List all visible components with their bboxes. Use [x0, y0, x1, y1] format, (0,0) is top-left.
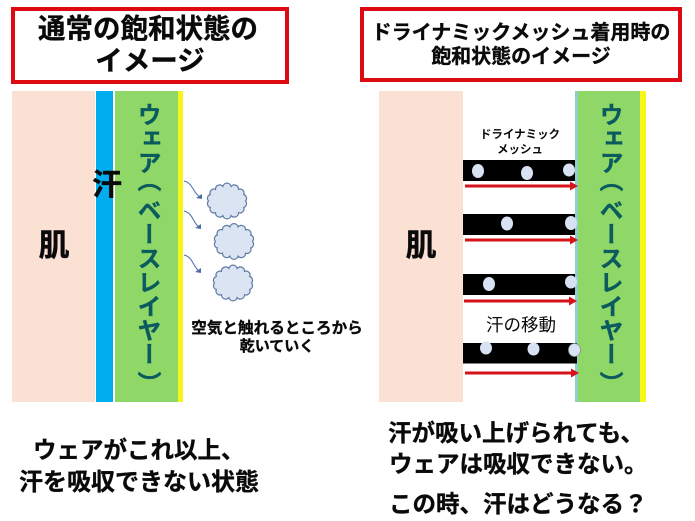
sweat movement label: 汗の移動 [486, 315, 556, 335]
panel: normal saturation [12, 9, 363, 496]
wear layer: ベースレイヤー [133, 198, 160, 366]
evaporation arrow 2 [184, 211, 201, 229]
wear layer [115, 91, 183, 402]
wear layer: ベースレイヤー [595, 198, 622, 366]
wear layer: ） [133, 371, 161, 395]
caption: drying: 乾いていく [240, 337, 314, 355]
arrow 1 [465, 182, 578, 190]
skin layer: 肌 [38, 228, 70, 263]
caption: drying: 空気と触れるところから [191, 318, 363, 337]
title box: dynamic mesh: 飽和状態のイメージ [431, 45, 611, 68]
mesh label: ドライナミック [480, 128, 560, 141]
title box: dynamic mesh: ドライナミックメッシュ着用時の [372, 21, 670, 44]
evaporation arrow 3 [184, 255, 201, 273]
text: sweat is lifted: ウェアは吸収できない。 [389, 451, 648, 477]
arrow 3 [464, 296, 577, 306]
mesh strand 1 [463, 160, 575, 181]
title box: normal saturation [13, 9, 287, 82]
mesh label [480, 128, 560, 156]
wear layer [575, 91, 646, 402]
panel: dynamic mesh saturation [362, 9, 680, 517]
text: question: この時、汗はどうなる？ [389, 491, 648, 517]
skin layer [12, 91, 95, 402]
cloud 1 [207, 183, 247, 219]
sweat layer: 汗 [92, 169, 122, 202]
text: wear cannot absorb [19, 436, 259, 496]
title box: normal saturation: イメージ [95, 45, 205, 76]
mesh strand 3 [463, 274, 577, 295]
mesh label: メッシュ [497, 144, 543, 156]
arrow 2 [465, 236, 578, 244]
text: sweat is lifted: 汗が吸い上げられても、 [388, 419, 644, 446]
mesh strand 4 [463, 342, 580, 364]
wear layer: （ [133, 168, 161, 192]
mesh strand 2 [463, 214, 577, 235]
wear layer: ウェア [595, 102, 622, 174]
wear layer: ウェア [133, 102, 160, 174]
text: wear cannot absorb: ウェアがこれ以上、 [33, 436, 244, 463]
skin layer: 肌 [406, 228, 436, 263]
caption: drying [191, 318, 363, 355]
title box: normal saturation: 通常の飽和状態の [38, 13, 258, 44]
wear layer: （ [595, 168, 623, 192]
title box: dynamic mesh [362, 9, 680, 80]
skin layer [379, 91, 463, 402]
wear layer: ） [595, 371, 623, 395]
cloud 2 [214, 224, 254, 259]
sweat layer [92, 91, 122, 402]
evaporation arrow 1 [184, 181, 202, 199]
text: wear cannot absorb: 汗を吸収できない状態 [19, 469, 259, 496]
arrow 4 [465, 368, 579, 378]
cloud 3 [213, 265, 253, 301]
text: sweat is lifted [388, 419, 648, 477]
